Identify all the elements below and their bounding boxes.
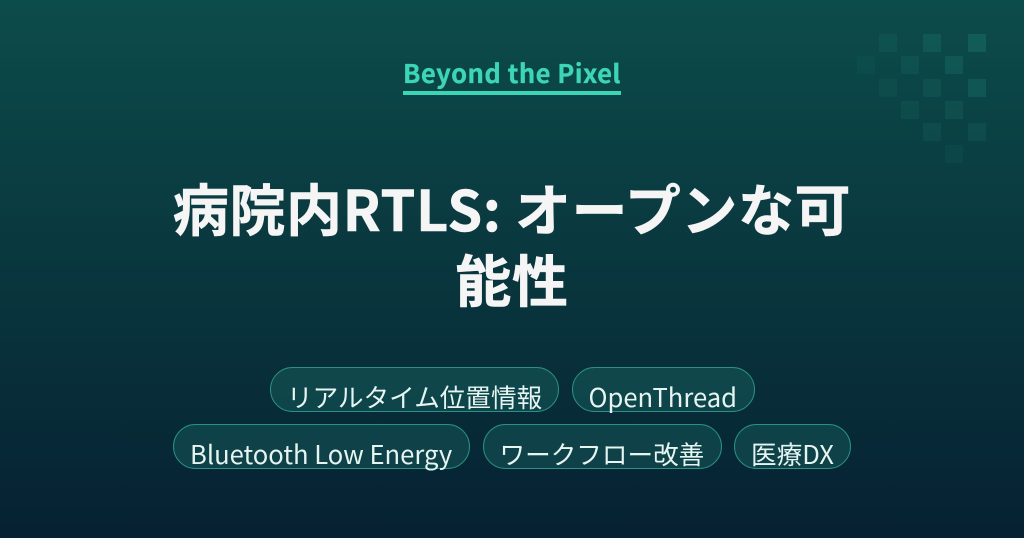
tag: ワークフロー改善: ワークフロー改善 (500, 435, 704, 472)
tag: リアルタイム位置情報: リアルタイム位置情報 (287, 378, 542, 415)
tag: OpenThread (572, 367, 755, 412)
tag: Bluetooth Low Energy: Bluetooth Low Energy (190, 435, 452, 472)
title: 能性 (455, 238, 569, 319)
tag: リアルタイム位置情報 (270, 367, 559, 412)
decorative checker pattern (879, 34, 986, 141)
tag: 医療DX (734, 424, 851, 469)
tag: ワークフロー改善 (482, 424, 722, 469)
tag: OpenThread: OpenThread (588, 378, 737, 415)
title (173, 167, 851, 319)
tag: 医療DX: 医療DX (751, 435, 834, 472)
tag: Bluetooth Low Energy (173, 424, 470, 469)
brand label: Beyond the Pixel: Beyond the Pixel (403, 54, 621, 90)
title: 病院内RTLS: オープンな可 (173, 167, 851, 248)
